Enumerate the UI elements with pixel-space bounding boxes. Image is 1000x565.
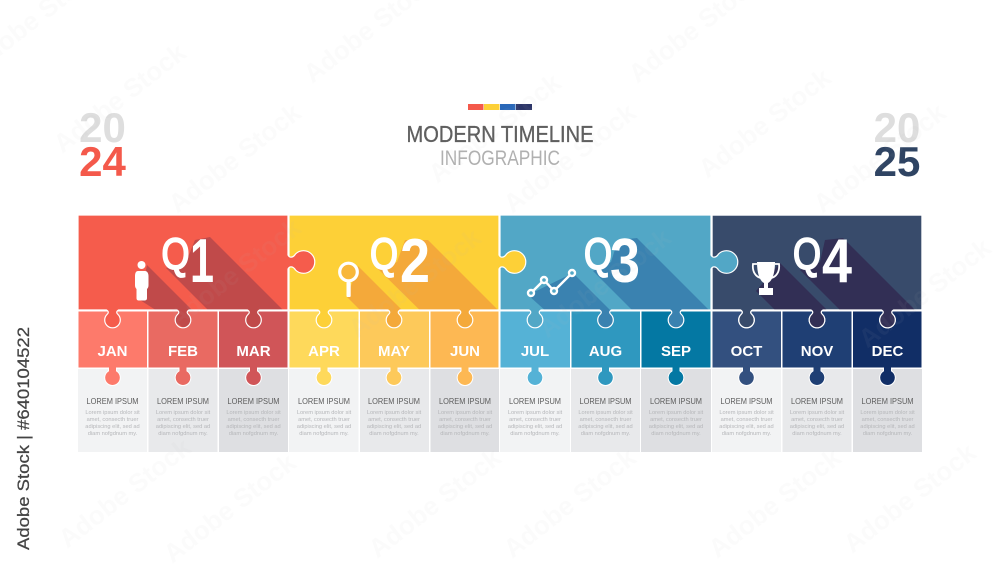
month labels: AUG	[589, 343, 622, 360]
card text: body: Lorem ipsum dolor sit	[860, 410, 915, 416]
panel: Q4	[712, 215, 935, 330]
card text: body: adipiscing elit, sed ad	[578, 424, 633, 430]
card text: body: diam nofgdnum my.	[792, 431, 842, 437]
card text: body: Lorem ipsum dolor sit	[578, 410, 633, 416]
card text: body: amet, consecth truer	[157, 417, 209, 423]
card text: headings: LOREM IPSUM	[298, 396, 350, 406]
card text: headings: LOREM IPSUM	[720, 396, 773, 406]
card text: body: amet, consecth truer	[580, 417, 632, 423]
month labels: APR	[308, 343, 340, 360]
info cards row	[78, 369, 922, 452]
watermark: Adobe Stock	[48, 37, 192, 159]
card text: body: diam nofgdnum my.	[863, 431, 913, 437]
panel: Q1	[78, 215, 315, 330]
card text: body: diam nofgdnum my.	[722, 431, 772, 437]
month labels: OCT	[731, 343, 762, 360]
card text: headings: LOREM IPSUM	[228, 396, 280, 406]
card text: headings: LOREM IPSUM	[157, 396, 209, 406]
card text: body: amet, consecth truer	[228, 417, 280, 423]
year 2024: 24	[79, 138, 126, 185]
card text: body: amet, consecth truer	[368, 417, 420, 423]
card text: headings: LOREM IPSUM	[580, 396, 632, 406]
card text: body: adipiscing elit, sed ad	[649, 424, 703, 430]
card text: body: diam nofgdnum my.	[581, 431, 631, 437]
watermark: Adobe Stock	[498, 442, 642, 564]
card text: body: adipiscing elit, sed ad	[790, 424, 844, 430]
watermark: Adobe Stock	[163, 97, 307, 219]
card text: body: adipiscing elit, sed ad	[719, 424, 774, 430]
subtitle: INFOGRAPHIC	[440, 147, 560, 170]
panel: Q2: Q	[370, 230, 398, 279]
card text: body: diam nofgdnum my.	[510, 431, 560, 437]
card text: headings	[86, 396, 914, 406]
watermark: Adobe Stock	[343, 222, 487, 344]
watermark: Adobe Stock	[53, 432, 197, 554]
month labels: SEP	[661, 343, 691, 360]
card text: body: amet, consecth truer	[298, 417, 350, 423]
month labels: JAN	[97, 343, 128, 360]
title: MODERN TIMELINE	[406, 121, 594, 147]
card text: body: diam nofgdnum my.	[651, 431, 701, 437]
month labels: JUL	[521, 343, 549, 360]
panel: Q4: 4	[822, 227, 852, 296]
card text: headings: LOREM IPSUM	[368, 396, 420, 406]
card text: body: adipiscing elit, sed ad	[226, 424, 281, 430]
panel: Q3: 3	[610, 227, 640, 296]
card text: body	[85, 410, 915, 437]
year 2025	[874, 104, 920, 185]
year 2025: 25	[874, 138, 920, 185]
year 2024	[79, 104, 126, 185]
card text: body: diam nofgdnum my.	[440, 431, 490, 437]
card text: body: adipiscing elit, sed ad	[438, 424, 492, 430]
card text: body: Lorem ipsum dolor sit	[438, 410, 493, 416]
watermark: Adobe Stock	[498, 97, 642, 219]
panel: Q2	[289, 215, 526, 330]
panel: Q3: Q	[584, 230, 612, 279]
month labels	[97, 343, 904, 360]
watermark: Adobe Stock	[838, 437, 982, 559]
watermark: Adobe Stock	[533, 222, 677, 344]
card text: body: Lorem ipsum dolor sit	[297, 410, 352, 416]
card text: body: Lorem ipsum dolor sit	[367, 410, 422, 416]
card text: body: Lorem ipsum dolor sit	[649, 410, 704, 416]
month labels: FEB	[168, 343, 198, 360]
card text: body: Lorem ipsum dolor sit	[156, 410, 211, 416]
card text: headings: LOREM IPSUM	[791, 396, 843, 406]
card text: body: adipiscing elit, sed ad	[156, 424, 210, 430]
card text: body: Lorem ipsum dolor sit	[85, 410, 140, 416]
watermark: Adobe Stock	[693, 62, 837, 184]
card text: body: amet, consecth truer	[721, 417, 773, 423]
month tiles	[78, 311, 922, 385]
watermark: Adobe Stock	[363, 442, 507, 564]
icon: line chart	[528, 270, 575, 296]
card text: headings: LOREM IPSUM	[439, 396, 491, 406]
watermark: Adobe Stock	[163, 212, 307, 334]
card text: body: adipiscing elit, sed ad	[85, 424, 140, 430]
year 2025: 20	[874, 104, 920, 151]
colour bar	[468, 104, 532, 110]
card text: body: diam nofgdnum my.	[369, 431, 419, 437]
card text: body: amet, consecth truer	[439, 417, 491, 423]
watermark: Adobe Stock	[423, 67, 567, 189]
icon: person	[135, 261, 148, 300]
card text: body: amet, consecth truer	[791, 417, 843, 423]
card text: headings: LOREM IPSUM	[650, 396, 702, 406]
card text: body: diam nofgdnum my.	[158, 431, 208, 437]
month labels: NOV	[801, 343, 833, 360]
watermark: Adobe Stock	[853, 232, 997, 354]
panel: Q2: 2	[400, 227, 430, 296]
card text: headings: LOREM IPSUM	[509, 396, 561, 406]
month labels: JUN	[450, 343, 480, 360]
watermark: Adobe Stock	[703, 442, 847, 564]
panel: Q1: Q	[162, 230, 190, 279]
card text: body: amet, consecth truer	[87, 417, 139, 423]
month labels: MAR	[236, 343, 271, 360]
card text: body: amet, consecth truer	[650, 417, 702, 423]
card text: body: diam nofgdnum my.	[299, 431, 349, 437]
icon: magnifier	[340, 263, 357, 297]
panel: Q4: Q	[793, 230, 821, 279]
card text: body: Lorem ipsum dolor sit	[790, 410, 845, 416]
card text: headings: LOREM IPSUM	[86, 396, 139, 406]
card text: body: amet, consecth truer	[509, 417, 561, 423]
card text: headings: LOREM IPSUM	[862, 396, 914, 406]
card text: body: adipiscing elit, sed ad	[860, 424, 915, 430]
month labels: DEC	[872, 343, 904, 360]
vertical stock id: Adobe Stock | #640104522	[14, 327, 33, 550]
card text: body: Lorem ipsum dolor sit	[719, 410, 774, 416]
card text: body: adipiscing elit, sed ad	[297, 424, 351, 430]
panel: Q1: 1	[190, 227, 214, 296]
panel: Q3	[500, 215, 738, 330]
card text: body: adipiscing elit, sed ad	[367, 424, 421, 430]
year 2024: 20	[79, 104, 126, 151]
card text: body: Lorem ipsum dolor sit	[508, 410, 563, 416]
card text: body: diam nofgdnum my.	[88, 431, 138, 437]
month labels: MAY	[378, 343, 410, 360]
icon: trophy	[753, 262, 779, 295]
watermark: Adobe Stock	[808, 97, 952, 219]
card text: body: adipiscing elit, sed ad	[508, 424, 562, 430]
card text: body: diam nofgdnum my.	[229, 431, 279, 437]
card text: body: Lorem ipsum dolor sit	[226, 410, 281, 416]
card text: body: amet, consecth truer	[862, 417, 914, 423]
